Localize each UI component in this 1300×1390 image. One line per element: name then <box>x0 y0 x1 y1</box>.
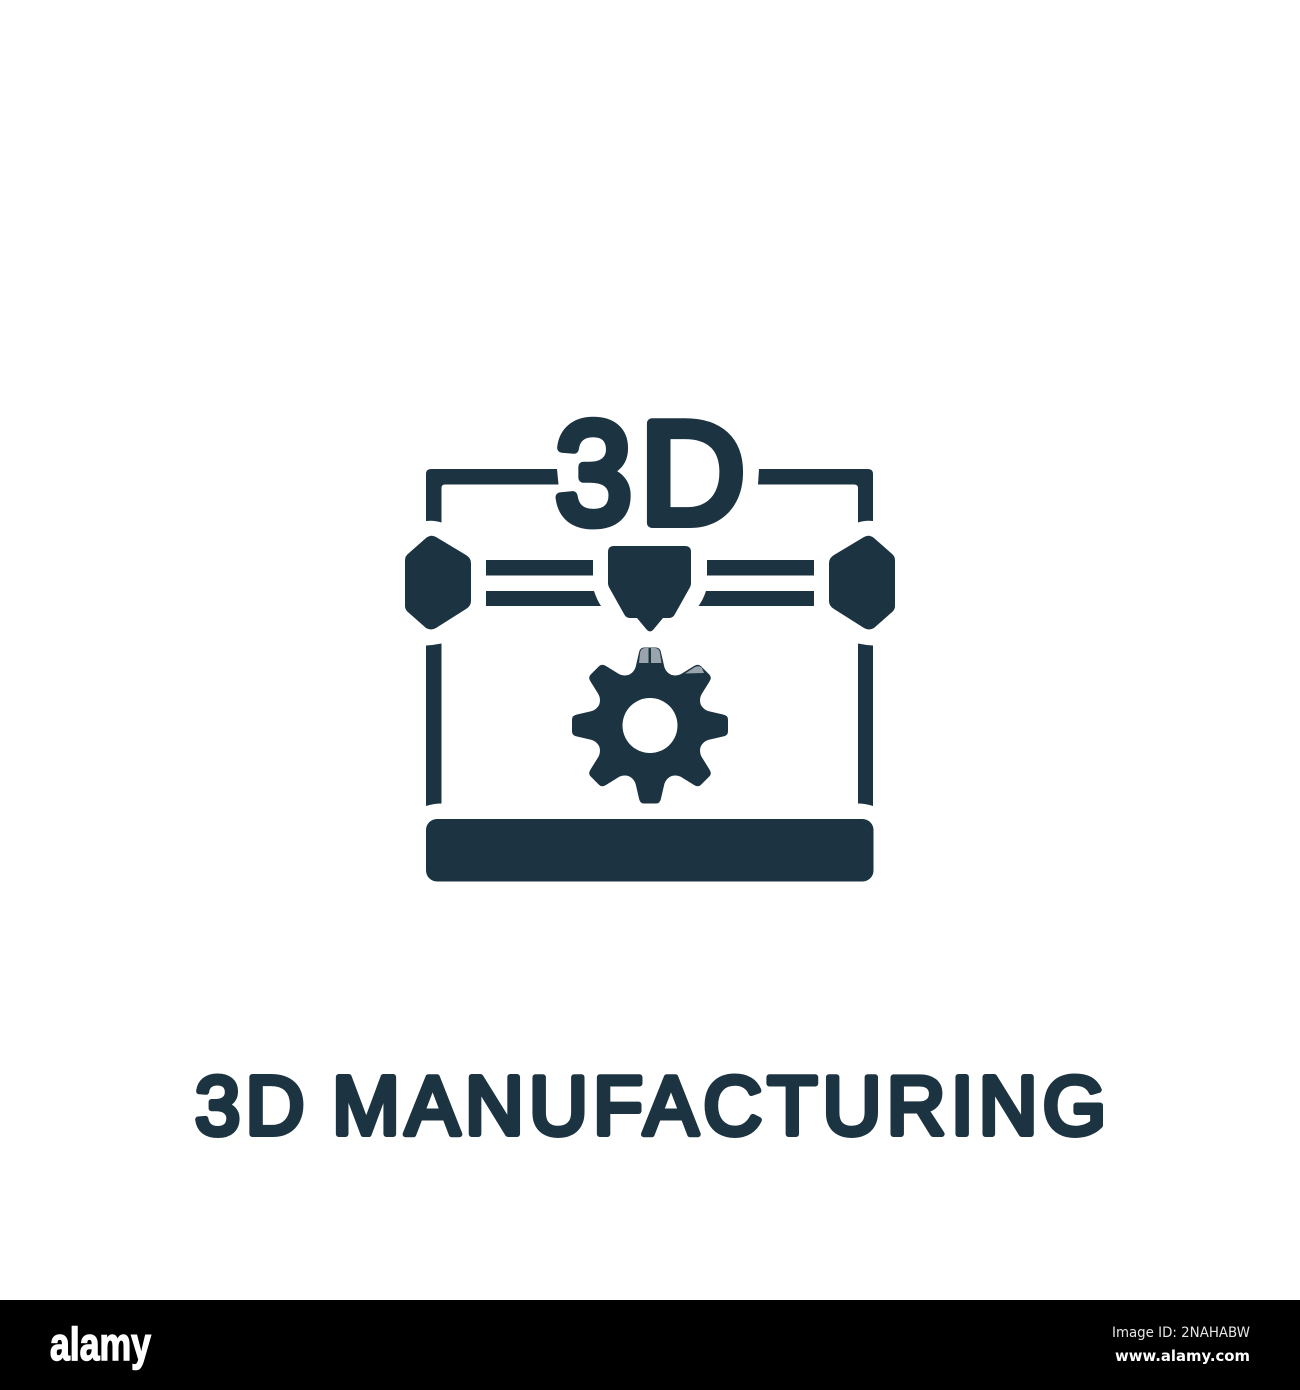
icon: gear <box>572 648 728 804</box>
icon: print bed <box>426 819 874 882</box>
title: MANUFACTURING <box>332 1060 1112 1152</box>
icon: printer frame lower right <box>858 644 873 806</box>
title: 3D <box>195 1060 310 1152</box>
icon: left lower rail <box>486 591 601 606</box>
footer website: www.alamy.com <box>1115 1347 1250 1365</box>
footer bar <box>0 1300 1300 1390</box>
icon: left hexagon carriage <box>405 536 471 630</box>
icon: gray artifact on top gear tooth <box>639 648 662 663</box>
icon: printer frame top right <box>758 469 873 522</box>
icon: right hexagon carriage <box>829 536 895 630</box>
footer logo: alamy: alamy <box>50 1318 151 1370</box>
icon label: 3D: D <box>640 392 745 554</box>
icon: right upper rail <box>707 560 814 576</box>
icon: left upper rail <box>486 560 593 576</box>
icon label: 3D: 3 <box>555 392 632 554</box>
icon: printer frame top left <box>426 469 558 522</box>
icon: gray artifact on diagonal gear tooth <box>685 666 704 674</box>
icon: 3D printer <box>405 392 895 882</box>
icon: print nozzle <box>608 546 691 632</box>
icon: right lower rail <box>698 591 814 606</box>
footer image id: Image ID: 2NAHABW <box>1112 1325 1250 1341</box>
icon: printer frame lower left <box>426 644 442 806</box>
